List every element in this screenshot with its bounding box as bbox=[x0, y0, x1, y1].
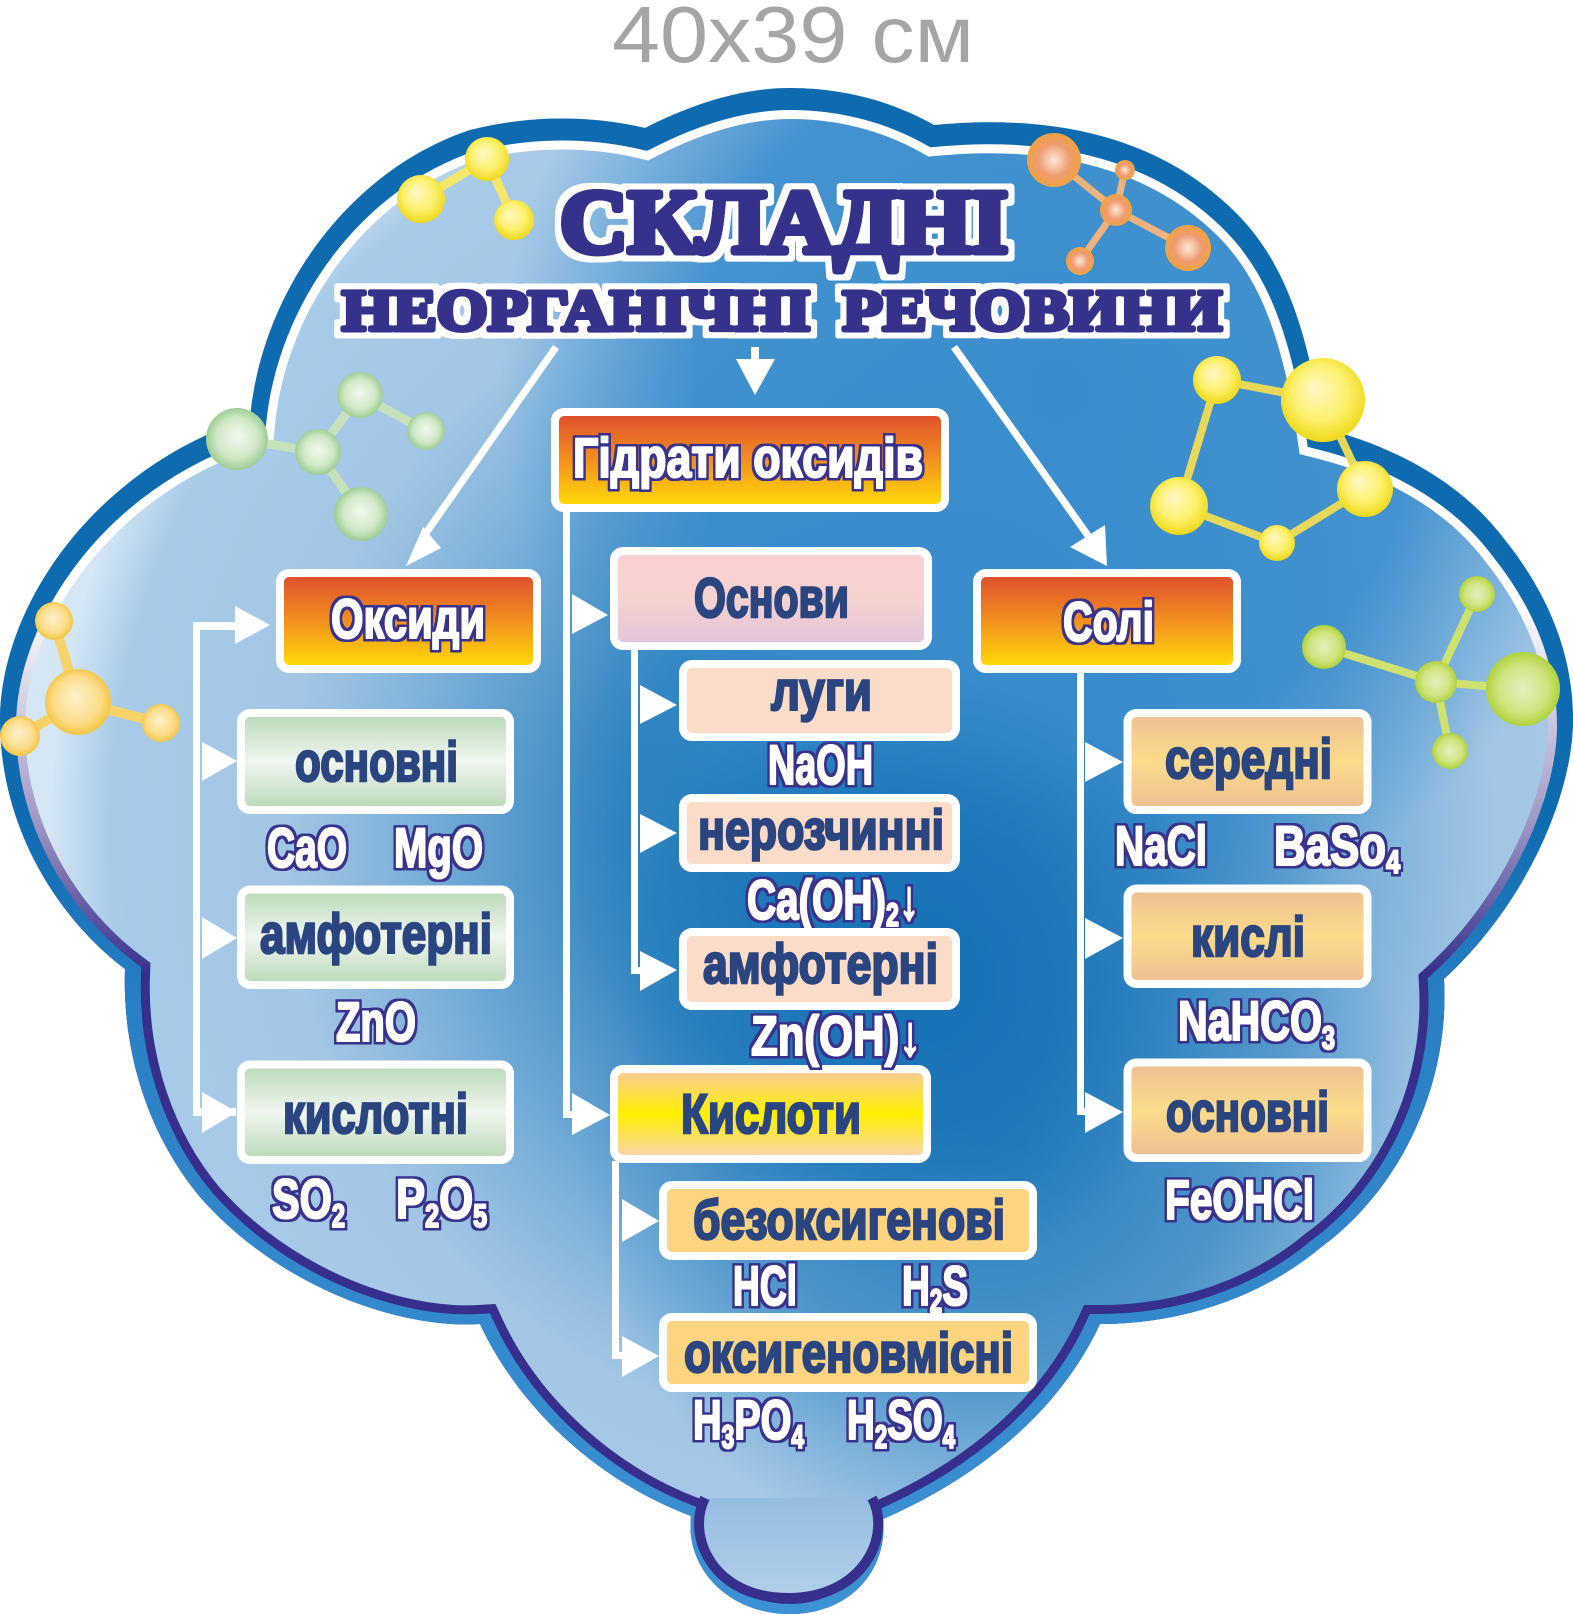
formulas: oxygen-free acids bbox=[733, 1254, 968, 1319]
header box: oxide hydrates: Гідрати оксидів bbox=[573, 426, 923, 489]
box: neutral salts: середні bbox=[1165, 727, 1332, 790]
formulas: oxygen-containing acids: H bbox=[847, 1388, 887, 1451]
formula: acid salt: 3 bbox=[1322, 1020, 1335, 1056]
formulas: basic oxides: CaO bbox=[267, 816, 347, 879]
formulas: oxygen-containing acids: 2 bbox=[875, 1419, 887, 1455]
group: oxide types bbox=[241, 713, 510, 1234]
box: oxygen-containing acids: оксигеновмісні bbox=[684, 1321, 1013, 1384]
formulas: oxygen-free acids: 2 bbox=[930, 1283, 942, 1319]
box: acids: Кислоти bbox=[681, 1082, 861, 1145]
box: basic oxides bbox=[241, 713, 510, 810]
arrow: title to oxides bbox=[406, 345, 559, 566]
header box: salts bbox=[977, 573, 1237, 669]
formulas: acidic oxides: SO bbox=[272, 1167, 353, 1230]
molecule: gold far left bbox=[0, 602, 180, 756]
formulas: oxygen-free acids: HCl bbox=[733, 1254, 797, 1317]
header box: oxides: Оксиди bbox=[331, 587, 485, 650]
box: amphoteric oxides: амфотерні bbox=[260, 902, 492, 965]
box: amphoteric bases bbox=[683, 932, 956, 1006]
formula: insoluble base: ↓ bbox=[899, 868, 919, 931]
title: СКЛАДНІ bbox=[560, 173, 1008, 272]
box: oxygen-free acids: безоксигенові bbox=[693, 1188, 1005, 1251]
box: insoluble bases: нерозчинні bbox=[698, 798, 944, 861]
box: acids bbox=[614, 1069, 927, 1159]
title bbox=[342, 173, 1222, 343]
connector: oxides tree bbox=[193, 606, 270, 1133]
box: neutral salts bbox=[1128, 713, 1368, 810]
formulas: basic oxides bbox=[267, 816, 483, 879]
molecule: orange top right bbox=[1027, 133, 1211, 275]
formulas: acidic oxides: 5 bbox=[473, 1198, 487, 1234]
box: basic salts: основні bbox=[1166, 1080, 1329, 1143]
formulas: oxygen-free acids: S bbox=[942, 1254, 968, 1317]
box: bases bbox=[614, 551, 928, 646]
box: amphoteric oxides bbox=[241, 890, 510, 985]
molecule: lime far right bbox=[1302, 576, 1560, 769]
box: acidic oxides: кислотні bbox=[283, 1082, 468, 1145]
formula: acid salt: NaHCO bbox=[1178, 989, 1374, 1052]
formula: basic salt: FeOHCl bbox=[1165, 1168, 1314, 1231]
formulas: oxygen-free acids: H bbox=[902, 1254, 942, 1317]
header box: oxide hydrates bbox=[555, 412, 945, 508]
formula: amphoteric oxide: ZnO bbox=[336, 990, 416, 1053]
molecule: yellow ring right bbox=[1150, 356, 1393, 561]
formulas: neutral salts: 4 bbox=[1386, 844, 1400, 880]
connector: salts tree bbox=[1077, 671, 1123, 1133]
header box: salts: Солі bbox=[1063, 590, 1154, 653]
box: amphoteric bases: амфотерні bbox=[703, 932, 938, 995]
formulas: basic oxides: MgO bbox=[394, 816, 483, 879]
formula: insoluble base: 2 bbox=[886, 897, 899, 933]
formulas: acidic oxides: 2 bbox=[425, 1198, 439, 1234]
box: alkalis: луги bbox=[771, 659, 872, 722]
title: НЕОРГАНІЧНІ РЕЧОВИНИ bbox=[342, 278, 1222, 343]
formulas: acidic oxides: 2 bbox=[332, 1198, 345, 1234]
formulas: oxygen-containing acids bbox=[693, 1388, 955, 1455]
formulas: oxygen-containing acids: 4 bbox=[791, 1419, 804, 1455]
formulas: oxygen-containing acids: H bbox=[693, 1388, 733, 1451]
formulas: acidic oxides: O bbox=[439, 1167, 473, 1230]
box: basic salts bbox=[1128, 1062, 1368, 1158]
formula: alkali: NaOH bbox=[768, 733, 873, 796]
box: bases: Основи bbox=[694, 566, 849, 629]
box: acid salts: кислі bbox=[1191, 905, 1305, 968]
formulas: neutral salts: NaCl bbox=[1115, 814, 1207, 877]
group: salt types bbox=[1115, 713, 1400, 1231]
box: basic oxides: основні bbox=[295, 730, 458, 793]
box: acid salts bbox=[1128, 888, 1368, 984]
formulas: acidic oxides bbox=[272, 1167, 487, 1234]
formulas: oxygen-containing acids: 4 bbox=[943, 1419, 955, 1455]
molecule: green left bbox=[206, 372, 445, 541]
formula: amphoteric base: Zn(OH)↓ bbox=[751, 1004, 921, 1067]
connector: acids tree bbox=[612, 1161, 659, 1377]
formulas: oxygen-containing acids: 3 bbox=[722, 1419, 734, 1455]
formulas: acidic oxides: P bbox=[396, 1167, 433, 1230]
box: acidic oxides bbox=[241, 1064, 510, 1160]
group: acid types bbox=[663, 1185, 1033, 1455]
arrow: title to oxide hydrates bbox=[736, 347, 775, 395]
group: base types bbox=[683, 659, 956, 1067]
formulas: neutral salts bbox=[1115, 814, 1400, 880]
molecule: yellow top left bbox=[397, 137, 534, 240]
connector: hydrates tree bbox=[563, 510, 610, 1135]
connector: bases tree bbox=[631, 648, 677, 991]
formulas: oxygen-containing acids: SO bbox=[887, 1388, 943, 1451]
formulas: oxygen-containing acids: PO bbox=[734, 1388, 791, 1451]
box: alkalis bbox=[683, 659, 956, 737]
header box: oxides bbox=[280, 573, 537, 669]
formulas: neutral salts: BaSo bbox=[1274, 814, 1417, 877]
formula: insoluble base: Ca(OH) bbox=[747, 868, 940, 931]
arrow: title to salts bbox=[951, 345, 1107, 566]
